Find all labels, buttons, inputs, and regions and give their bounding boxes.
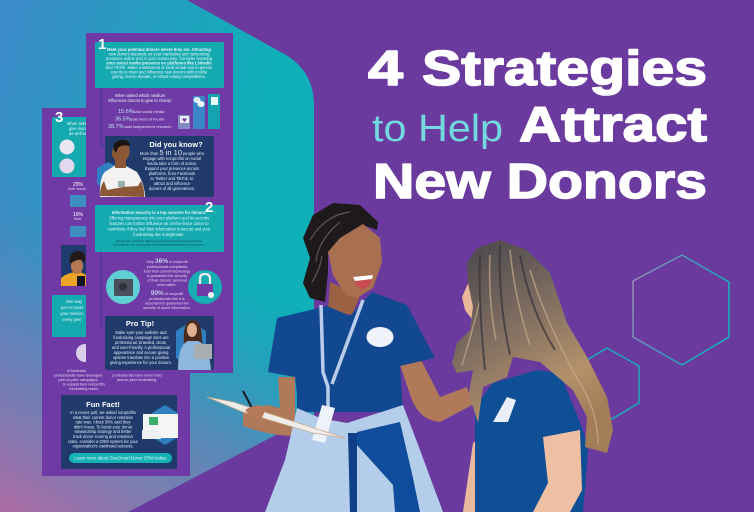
fun fact line 8: organization's continued success. <box>72 444 134 449</box>
teal text box 4 <box>52 295 92 337</box>
man shirt <box>100 166 145 197</box>
line 5: and TikTok. Make a statement at local virtual and in-person <box>106 65 213 70</box>
woman shirt <box>178 341 211 370</box>
peer-to-peer text: One way <box>66 299 83 304</box>
body line 2: fundraising campaign sites are <box>113 335 169 340</box>
stat 36% line 6: information. <box>157 283 177 287</box>
title <box>368 42 707 209</box>
caption line 2: professionals have leveraged <box>54 374 102 378</box>
pen <box>243 391 252 408</box>
bar research <box>208 94 220 129</box>
did you know panel <box>97 136 214 197</box>
teal text box 2 <box>95 205 224 252</box>
shirt panel right <box>357 422 420 512</box>
stat 38.7% label: said independent research <box>124 124 172 129</box>
right statistic caption <box>112 374 162 382</box>
stat 15.6%: 15.6% <box>118 109 134 115</box>
chart question line 2: influences donors to give to charity: <box>108 98 172 103</box>
fun fact text: In a recent poll, we asked nonprofits <box>70 410 136 415</box>
stat 29% label: their donors <box>68 187 88 191</box>
stat 36% line 4: to guarantee the security <box>147 274 187 278</box>
photo background <box>61 245 89 286</box>
CRM screenshot <box>143 414 178 438</box>
photo: smiling woman with clipboard <box>207 203 472 512</box>
lock circle <box>188 270 222 304</box>
small hexagon outline <box>587 348 639 420</box>
bar social media <box>178 115 190 129</box>
teal box 3 third line: as well as <box>69 131 87 136</box>
caption line 1: of fundraising <box>67 369 89 373</box>
number 2: 2 <box>205 199 213 216</box>
stat 99% line 3: important to guarantee the <box>145 302 189 306</box>
lock shackle <box>200 274 210 284</box>
ID badge <box>312 405 335 443</box>
CRM second window <box>142 430 161 439</box>
lanyard <box>321 300 363 407</box>
icon: chat bubbles <box>194 97 204 107</box>
icon: document circle <box>60 140 74 154</box>
chart question line 1: When asked which medium <box>115 93 166 98</box>
body line 6: options translate into a positive <box>113 355 170 360</box>
man phone <box>118 181 125 187</box>
fun fact background <box>61 395 177 469</box>
hair highlights <box>310 212 350 282</box>
caption line 3: peer-to-peer campaigns <box>58 378 98 382</box>
clipboard <box>207 397 345 438</box>
caption line 5: fundraising reach. <box>69 387 99 391</box>
photo face <box>71 258 83 274</box>
fun fact line 5: stewardship strategy and better <box>74 429 132 434</box>
line 4: your social media presence on platforms like LinkedIn <box>106 60 212 66</box>
line 3: features can further influence an on-the-fence donor to <box>110 221 209 226</box>
infographic page: strategies 1 and 2 <box>86 33 233 373</box>
line 3: presence online and in your community. Consider boosting <box>106 56 213 61</box>
body line 1: More than 5 in 10 people who <box>140 148 205 157</box>
page background 3 <box>42 108 190 476</box>
photo: woman with long hair <box>452 240 613 512</box>
peer-to-peer line 4: every peer <box>62 317 82 322</box>
line 2: new donors depends on your marketing and networking <box>109 52 210 56</box>
body line 4: and user-friendly. A professional <box>112 345 170 350</box>
stat 38.7%: 38.7% <box>108 124 124 130</box>
icon circle <box>76 344 94 362</box>
CTA label: Learn more about GiveSmart Donor CRM today! <box>74 456 167 460</box>
box 2 text <box>108 210 211 246</box>
stat 36.5% label: said word of mouth <box>130 116 164 122</box>
line 4: contribute if they feel their information is secure and your <box>108 226 211 232</box>
fun fact heading: Fun Fact! <box>86 400 120 409</box>
caption line 2: peer-to-peer fundraising. <box>117 378 157 382</box>
blue shirt <box>475 370 588 512</box>
CRM green tile <box>149 417 158 425</box>
body line 7: giving experience for your donors. <box>110 360 172 365</box>
icon: notepad <box>211 97 218 105</box>
body line 7: attract and influence <box>154 181 191 186</box>
safe body <box>114 279 133 296</box>
icon: safe <box>106 270 140 304</box>
teal text box 1 <box>95 42 224 88</box>
stat 99%: 99% of nonprofit <box>151 290 183 297</box>
fun fact panel <box>61 395 178 469</box>
safe dial <box>119 283 127 291</box>
icon: padlock <box>188 270 222 304</box>
safe circle <box>106 270 140 304</box>
fine print 2: up to date so you can promise a secure giving experience to every donor. <box>114 242 205 246</box>
bar 29% <box>70 195 90 207</box>
heading: Did you know? <box>149 140 203 149</box>
fun fact line 3: rate was. About 30% said they <box>75 420 131 425</box>
body line 2: engage with nonprofits on social <box>143 156 201 161</box>
man hair <box>114 140 130 153</box>
stat 36% line 2: professionals completely <box>147 265 187 269</box>
icon: calendar circle <box>60 158 74 174</box>
backdrop base <box>0 0 314 512</box>
stat 19%: 19% <box>73 212 84 218</box>
box 1 text <box>106 47 213 79</box>
man arms <box>100 181 144 197</box>
teal box 3 second line: give more <box>69 126 88 131</box>
body line 8: donors of all generations. <box>149 186 195 191</box>
panel background <box>105 136 214 197</box>
photo: woman with laptop <box>178 320 212 370</box>
photo hair <box>70 251 85 264</box>
title line 1: number: 4 <box>368 42 403 96</box>
man neck and face <box>112 142 130 168</box>
body line 4: Expand your presence across <box>145 166 199 171</box>
hair <box>452 240 613 453</box>
stat 36% line 3: trust their current technology <box>144 270 191 274</box>
left statistic caption <box>54 369 105 391</box>
back arm <box>533 430 582 512</box>
lock check <box>208 292 214 298</box>
body line 6: to Twitter and TikTok, to <box>151 176 194 181</box>
shirt globe logo <box>366 327 394 347</box>
number 1: 1 <box>98 36 106 53</box>
peer-to-peer line 2: peer-to-peer <box>61 305 84 310</box>
denim jacket tied at waist <box>265 405 443 512</box>
title line 2 light: to Help <box>372 108 503 150</box>
stat 36.5%: 36.5% <box>115 116 131 122</box>
stat 19% label: their <box>74 217 82 221</box>
woman face <box>187 323 197 337</box>
right arm <box>400 358 472 422</box>
statistics: donor security <box>143 258 191 310</box>
hexagon accent <box>97 162 120 190</box>
stat 36% line 5: of their donors' personal <box>147 278 187 282</box>
backdrop lower-left tint <box>0 0 314 512</box>
heading: Pro Tip! <box>126 319 154 328</box>
face <box>328 224 382 298</box>
lock body <box>197 284 213 296</box>
decorative outlined hexagons <box>587 255 729 420</box>
caption line 1: professionals have never tried <box>112 374 162 378</box>
body line 5: appearance and secure giving <box>114 350 169 355</box>
pro tip panel <box>105 316 214 370</box>
body line 3: professional, branded, clean, <box>115 340 167 345</box>
line 1: Meet your potential donors where they are. Attracting <box>107 47 211 52</box>
bar word of mouth <box>193 96 205 129</box>
caption line 4: to expand their nonprofit's <box>63 382 105 386</box>
stat 99% line 2: professionals feel it is <box>149 297 185 301</box>
teal text box 3 <box>52 117 92 177</box>
gradient hexagon backdrop <box>0 0 314 512</box>
bar 19% <box>70 226 90 237</box>
fun fact line 6: track donor scoring and retention <box>73 434 134 439</box>
fun fact line 4: didn't know. To boost your donor <box>74 424 133 429</box>
teeth <box>353 275 373 281</box>
icon: heart screen <box>180 116 189 123</box>
left forearm <box>243 377 295 436</box>
woman hair <box>184 320 204 350</box>
line 1: Information security is a top concern for donors. <box>112 210 206 215</box>
stat 99% line 4: security of donor information. <box>143 306 191 310</box>
chart: donor influence <box>108 93 220 130</box>
body line 3: media take a form of action. <box>147 161 197 166</box>
panel background <box>105 316 214 370</box>
hair <box>303 203 378 302</box>
large hexagon outline <box>633 255 729 365</box>
front arm <box>463 440 477 512</box>
shirt logo <box>493 397 516 422</box>
title line 2 bold: Attract <box>519 98 707 152</box>
teal box 3 text: When asked <box>67 121 90 126</box>
photo shirt <box>61 272 89 286</box>
fun fact line 2: what their current donor retention <box>73 415 134 420</box>
title line 3: New Donors <box>373 155 707 209</box>
peer-to-peer line 3: your mission <box>61 311 84 316</box>
navy t-shirt <box>268 292 435 412</box>
number 3: 3 <box>55 109 63 126</box>
hair dark strands <box>480 245 555 370</box>
hexagon accent <box>176 322 206 367</box>
stat 29%: 29% <box>73 182 84 188</box>
page background 1 <box>86 33 233 373</box>
fine print 1: Partner with a provider that keeps your security and privacy protocols <box>116 239 202 243</box>
photo: woman with phone <box>61 245 89 286</box>
infographic page: strategy 3 <box>42 108 190 476</box>
connector lines <box>101 88 105 325</box>
stat 36%: Only 36% of nonprofit <box>146 258 188 265</box>
title line 1: word: Strategies <box>422 42 707 96</box>
face profile <box>462 270 474 322</box>
line 6: events to meet and influence new donors with mobile <box>111 70 208 74</box>
body line 5: platforms, from Facebook <box>149 171 196 176</box>
line 5: fundraising site is legitimate. <box>133 232 185 237</box>
hexagon accent behind screenshot <box>152 405 178 445</box>
laptop <box>194 344 212 359</box>
CTA button <box>69 453 172 463</box>
mouth <box>353 275 373 290</box>
photo: man with phone <box>100 140 145 197</box>
stat 15.6% label: said social media <box>134 109 165 114</box>
neck <box>328 282 360 315</box>
line 2: Offering transparency into your platform and its security <box>109 216 210 220</box>
hair highlights <box>462 250 598 445</box>
hand on clipboard <box>245 405 266 418</box>
shirt below knot <box>348 433 357 512</box>
fun fact line 7: rates, consider a CRM system for your <box>68 439 139 444</box>
body line 1: Make sure your website and <box>115 330 167 335</box>
photo phone <box>77 276 85 286</box>
line 7: giving, text-to-donate, or virtual voting competitions. <box>112 74 206 79</box>
